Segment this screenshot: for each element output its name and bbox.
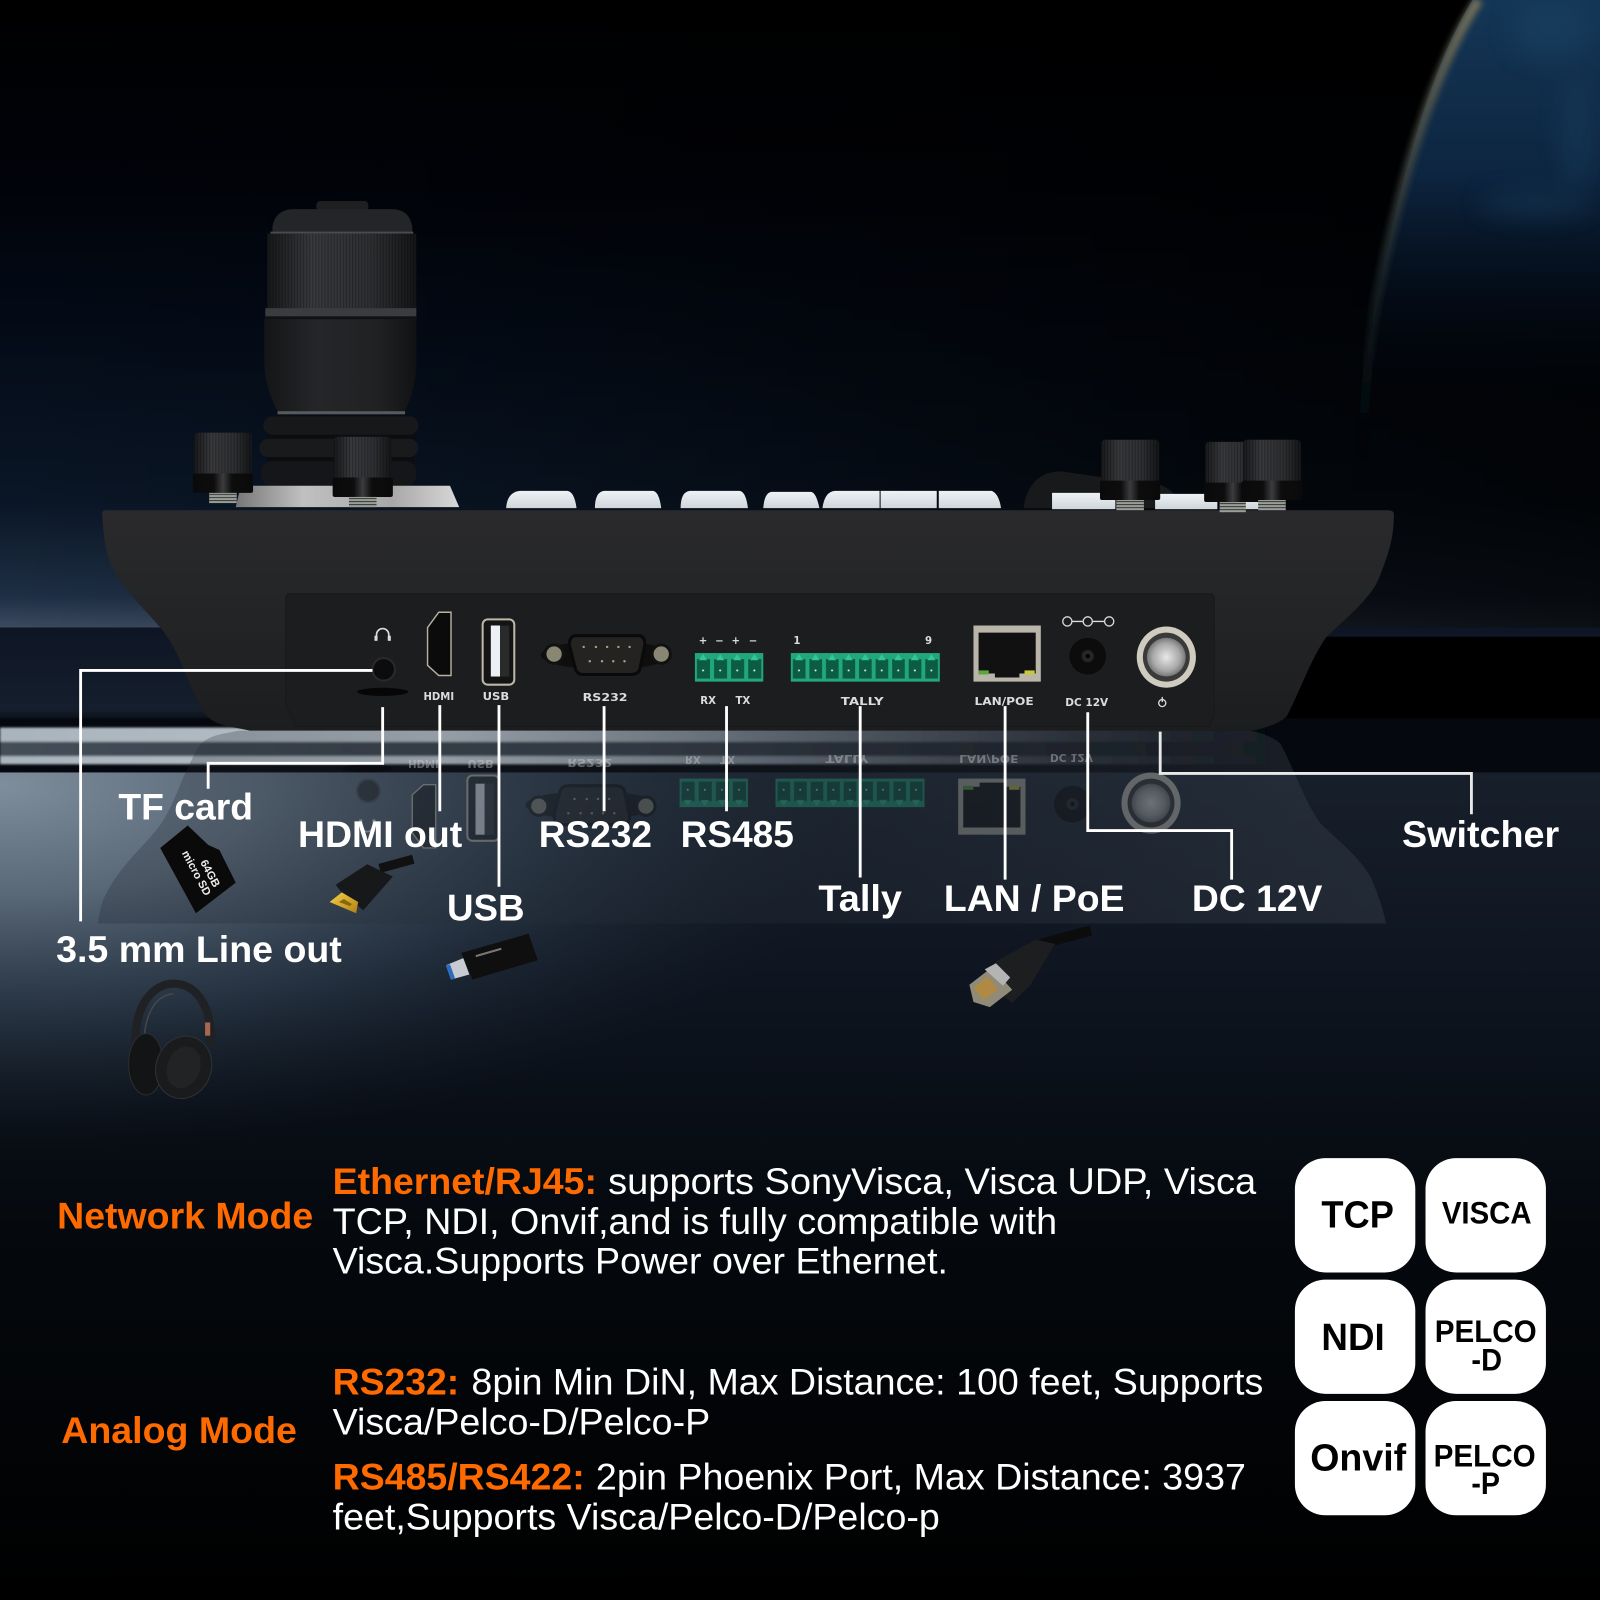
panel silk labels: 9 bbox=[925, 636, 932, 647]
badge: PELCO-D bbox=[1426, 1280, 1546, 1394]
reflection of the controller: DC 12V bbox=[1050, 751, 1093, 762]
badge: NDI: NDI bbox=[1321, 1316, 1385, 1358]
panel silk labels: LAN/POE bbox=[974, 697, 1034, 708]
panel silk labels: 1 bbox=[793, 636, 800, 647]
port: TF slot bbox=[357, 688, 408, 696]
reflection of the controller: RS232 bbox=[567, 756, 612, 767]
panel silk labels: DC 12V bbox=[1065, 698, 1108, 709]
rear small joystick and square buttons bbox=[1023, 471, 1259, 509]
text block: Ethernet description: supports SonyVisca, Visca UDP, Visca bbox=[608, 1160, 1256, 1202]
badge: TCP: TCP bbox=[1321, 1194, 1394, 1236]
icon: RJ45 plug bbox=[969, 931, 1091, 1007]
text block: RS485 description bbox=[333, 1455, 1246, 1538]
white keypad buttons bbox=[506, 491, 1001, 508]
joystick bbox=[259, 201, 418, 486]
panel silk labels: RS232 bbox=[583, 693, 628, 704]
labels: port names: Tally bbox=[818, 877, 902, 919]
text block: RS232 description: Visca/Pelco-D/Pelco-P bbox=[333, 1401, 710, 1443]
labels: port names bbox=[56, 785, 1559, 970]
controller body bbox=[102, 510, 1394, 731]
leader lines bbox=[81, 670, 1471, 921]
port: tally terminal bbox=[791, 653, 940, 682]
text block: Ethernet description bbox=[333, 1160, 1256, 1281]
icon: microSD card: micro SD bbox=[179, 849, 213, 898]
labels: port names: 3.5 mm Line out bbox=[56, 928, 342, 970]
labels: port names: Switcher bbox=[1402, 813, 1559, 855]
text block: RS232 description: 8pin Min DiN, Max Distance: 100 feet, Supports bbox=[471, 1360, 1263, 1402]
labels: port names: TF card bbox=[118, 785, 253, 827]
labels: port names: USB bbox=[447, 886, 524, 928]
port: RS232 bbox=[541, 636, 671, 674]
ports bbox=[357, 612, 1196, 696]
badge: PELCO-D: PELCO bbox=[1435, 1313, 1537, 1349]
badge: VISCA: VISCA bbox=[1442, 1194, 1532, 1230]
port: DC jack bbox=[1069, 638, 1106, 674]
badge: VISCA bbox=[1426, 1158, 1546, 1272]
panel silk labels: USB bbox=[483, 692, 509, 703]
panel silk labels: + bbox=[731, 636, 740, 647]
badge: PELCO-P bbox=[1426, 1401, 1546, 1515]
badge: TCP bbox=[1295, 1158, 1415, 1272]
planet at top right bbox=[1361, 0, 1600, 490]
badge: PELCO-P: PELCO bbox=[1434, 1437, 1536, 1473]
port: 3.5 mm jack bbox=[372, 629, 395, 681]
text block: Ethernet description: TCP, NDI, Onvif,and is fully compatible with bbox=[333, 1200, 1057, 1242]
labels: port names: HDMI out bbox=[298, 813, 462, 855]
reflection of the controller: USB bbox=[467, 757, 494, 768]
panel silk labels: RX bbox=[700, 696, 716, 707]
panel silk labels bbox=[423, 617, 1166, 709]
port: power switch bbox=[1137, 627, 1196, 688]
badge: PELCO-P: -P bbox=[1471, 1465, 1500, 1501]
panel silk labels: HDMI bbox=[423, 692, 454, 703]
panel silk labels: − bbox=[749, 636, 757, 647]
badge: Onvif bbox=[1295, 1401, 1415, 1515]
panel silk labels: TX bbox=[735, 696, 750, 707]
text block: RS485 description: 2pin Phoenix Port, Max Distance: 3937 bbox=[596, 1455, 1246, 1497]
icon: HDMI plug bbox=[330, 859, 413, 913]
reflection of the controller: LAN/POE bbox=[959, 752, 1018, 763]
panel silk labels: − bbox=[715, 636, 724, 647]
icon: headphones bbox=[129, 984, 220, 1106]
port: HDMI bbox=[428, 612, 451, 676]
panel silk labels: TALLY bbox=[841, 697, 884, 708]
text block: RS485 description: RS485/RS422: bbox=[333, 1455, 585, 1497]
badge: NDI bbox=[1295, 1280, 1415, 1394]
protocol badges bbox=[1295, 1158, 1546, 1515]
text block: RS485 description: feet,Supports Visca/Pelco-D/Pelco-p bbox=[333, 1496, 940, 1538]
labels: port names: RS485 bbox=[681, 813, 794, 855]
port: RS485 terminal bbox=[695, 653, 763, 682]
rubber knobs bbox=[193, 433, 1302, 512]
panel silk labels: + bbox=[699, 636, 707, 647]
reflection of the controller bbox=[98, 730, 1386, 924]
reflection of the controller: TALLY bbox=[826, 752, 869, 763]
heading: Network Mode: Network Mode bbox=[57, 1195, 313, 1237]
badge: Onvif: Onvif bbox=[1310, 1436, 1407, 1478]
labels: port names: DC 12V bbox=[1192, 877, 1323, 919]
text block: RS232 description bbox=[333, 1360, 1263, 1443]
text block: Ethernet description: Visca.Supports Power over Ethernet. bbox=[333, 1239, 948, 1281]
reflection of the controller: TX bbox=[720, 753, 735, 764]
labels: port names: LAN / PoE bbox=[944, 877, 1124, 919]
text block: RS232 description: RS232: bbox=[333, 1360, 459, 1402]
port: USB bbox=[483, 619, 514, 685]
labels: port names: RS232 bbox=[539, 813, 652, 855]
reflection of the controller: RX bbox=[685, 753, 701, 764]
reflection of the controller: HDMI bbox=[408, 757, 439, 768]
icon: microSD card: 64GB bbox=[197, 858, 222, 890]
icon: USB stick bbox=[446, 934, 538, 980]
port: RJ45 bbox=[973, 626, 1041, 682]
heading: Analog Mode: Analog Mode bbox=[61, 1409, 297, 1451]
joystick metal base bbox=[236, 486, 459, 507]
rear port panel bbox=[286, 594, 1214, 727]
icon: microSD card bbox=[160, 826, 236, 913]
badge: PELCO-D: -D bbox=[1471, 1341, 1502, 1377]
text block: Ethernet description: Ethernet/RJ45: bbox=[333, 1160, 597, 1202]
